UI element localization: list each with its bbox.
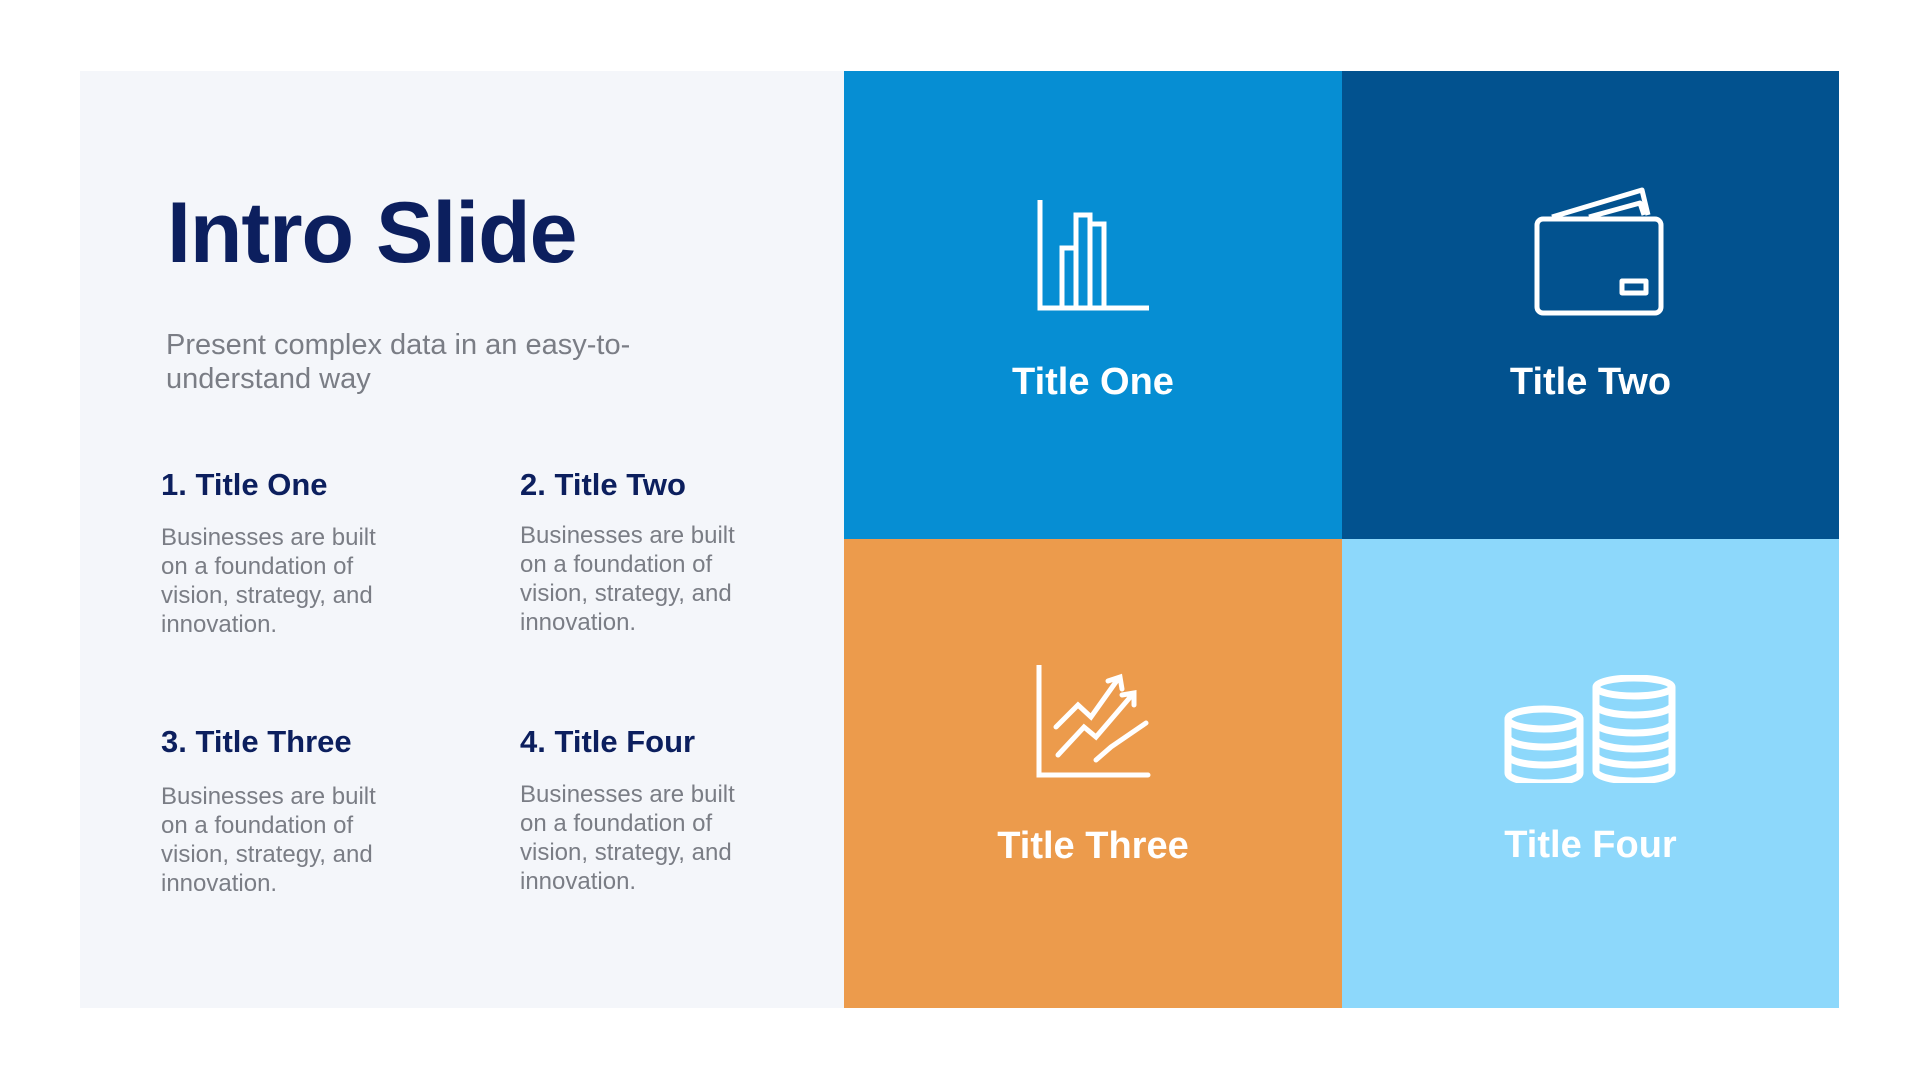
panel: title four	[1342, 539, 1839, 1008]
item 3 heading: 3. Title Three	[161, 724, 352, 759]
label: title four: Title Four	[1504, 824, 1677, 866]
title: Intro Slide	[167, 185, 576, 281]
item 3 text: Businesses are built on a foundation of vision, strategy, and innovation.	[161, 783, 376, 897]
icon: wallet	[1534, 188, 1664, 316]
label: title one: Title One	[1012, 361, 1174, 403]
subtitle: Present complex data in an easy-to-understand way	[166, 329, 630, 395]
icon: bar chart	[1038, 200, 1149, 310]
panel: left intro	[80, 71, 844, 1008]
panel: title two	[1342, 71, 1839, 540]
icon: growth chart	[1036, 665, 1150, 778]
item 4 text: Businesses are built on a foundation of vision, strategy, and innovation.	[520, 781, 735, 895]
label: title three: Title Three	[997, 825, 1189, 867]
item 1 heading: 1. Title One	[161, 467, 328, 502]
label: title two: Title Two	[1510, 361, 1671, 403]
item 4 heading: 4. Title Four	[520, 724, 695, 759]
panel: title three	[844, 539, 1342, 1008]
panel: title one	[844, 71, 1342, 540]
item 2 text: Businesses are built on a foundation of vision, strategy, and innovation.	[520, 522, 735, 636]
item 1 text: Businesses are built on a foundation of vision, strategy, and innovation.	[161, 524, 376, 638]
icon: coins	[1504, 675, 1676, 783]
item 2 heading: 2. Title Two	[520, 467, 686, 502]
